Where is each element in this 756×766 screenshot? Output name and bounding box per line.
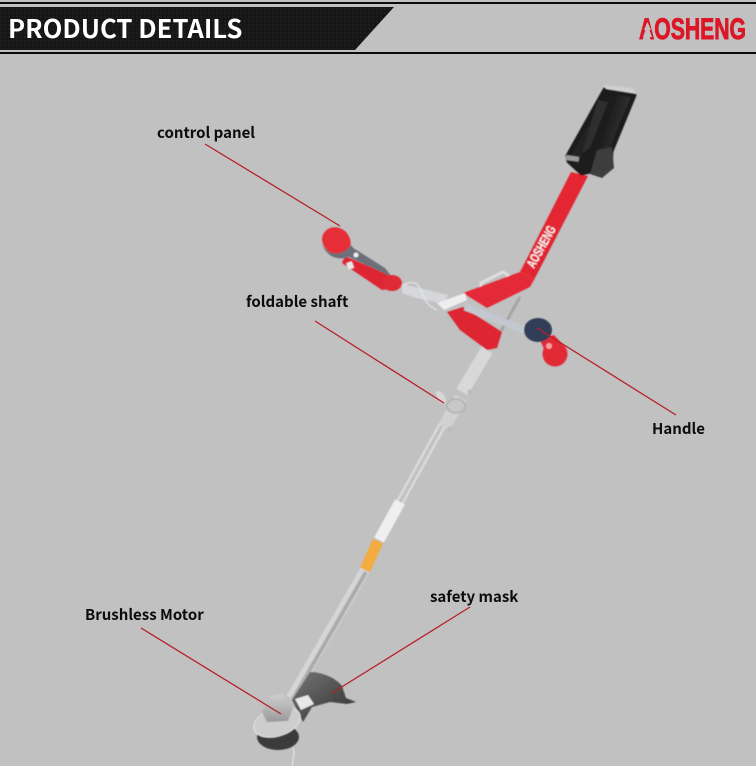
right handle bar: [465, 307, 527, 331]
title banner: [0, 7, 394, 50]
warning label: [365, 541, 378, 570]
motor label: [295, 695, 314, 710]
right grip: [524, 318, 568, 366]
label: foldable shaft: foldable shaft: [246, 291, 349, 312]
trimmer product: [250, 85, 637, 766]
battery pack: [566, 85, 637, 178]
motor cover: [262, 694, 293, 722]
label: control panel: control panel: [157, 122, 255, 143]
label: safety mask: safety mask: [430, 586, 518, 607]
control grip: [322, 227, 351, 255]
header bar: [0, 2, 756, 54]
foldable clamp: [434, 350, 487, 432]
red housing: [437, 272, 535, 350]
spool: [257, 724, 299, 750]
left handle bar: [322, 227, 448, 310]
safety guard: [292, 672, 356, 722]
upper tube logo: AOSHENG: [524, 223, 559, 270]
guard loop: [480, 272, 508, 296]
upper tube: [520, 172, 588, 278]
motor head: [250, 672, 356, 766]
title: PRODUCT DETAILS: [8, 9, 242, 46]
callout lines: [141, 144, 676, 714]
motor flange: [250, 701, 304, 743]
label: Handle: Handle: [652, 418, 705, 439]
shaft: [291, 422, 444, 699]
label: Brushless Motor: Brushless Motor: [85, 604, 204, 625]
